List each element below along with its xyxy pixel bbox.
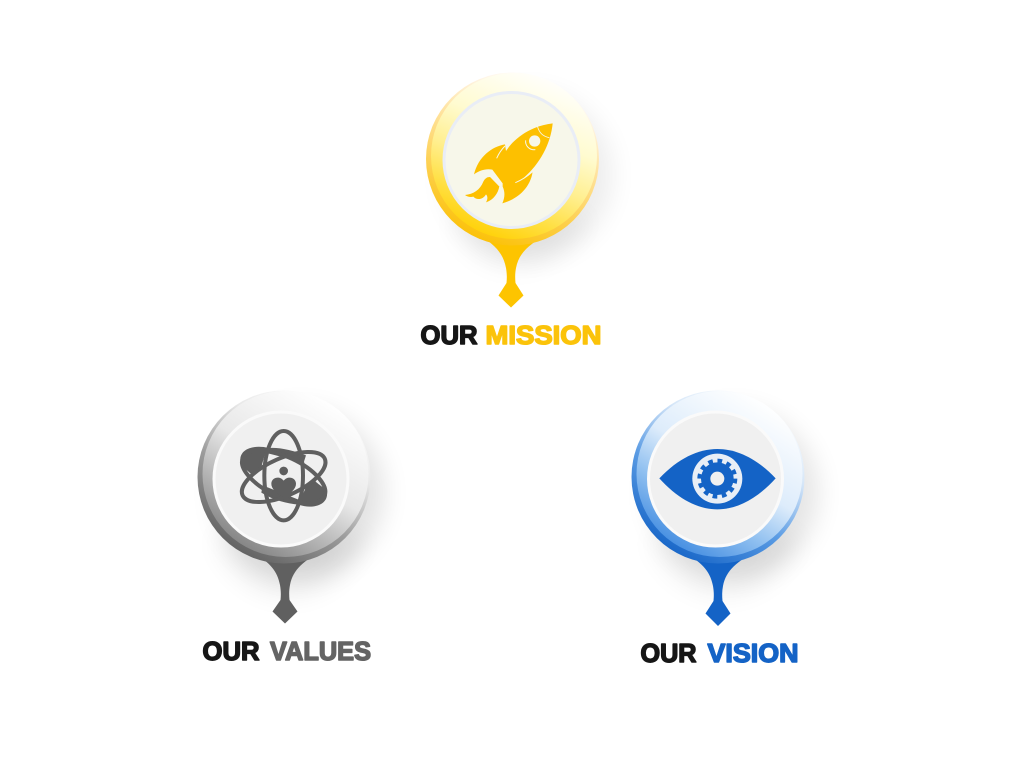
inner disc: vision	[648, 412, 782, 546]
icon: eye with gear	[659, 449, 776, 509]
label: our mission	[420, 320, 602, 350]
label: our vision: VISION	[708, 638, 798, 668]
pin shadow: mission	[444, 91, 612, 268]
inner disc: values	[214, 412, 348, 546]
pin ring: mission	[426, 72, 599, 246]
pin shadow: vision	[650, 409, 818, 595]
pin shadow: values	[215, 409, 384, 595]
inner disc: mission	[444, 92, 579, 228]
pin stem: mission	[475, 232, 550, 308]
label: our mission: MISSION	[486, 320, 602, 350]
panel: our vision	[632, 390, 818, 668]
pin ring: values	[198, 390, 370, 564]
panel: our mission	[420, 72, 612, 350]
panel: our values	[198, 390, 384, 666]
label: our values: VALUES	[270, 636, 371, 666]
pin stem: vision	[681, 550, 757, 626]
label: our values: OUR	[202, 636, 260, 666]
label: our values	[202, 636, 371, 666]
label: our mission: OUR	[420, 320, 478, 350]
label: our vision: OUR	[640, 638, 697, 668]
icon: rocket	[465, 123, 553, 203]
pin stem: values	[248, 549, 324, 624]
label: our vision	[640, 638, 798, 668]
pin ring: vision	[632, 390, 804, 564]
icon: atom with heart and person	[234, 431, 333, 520]
